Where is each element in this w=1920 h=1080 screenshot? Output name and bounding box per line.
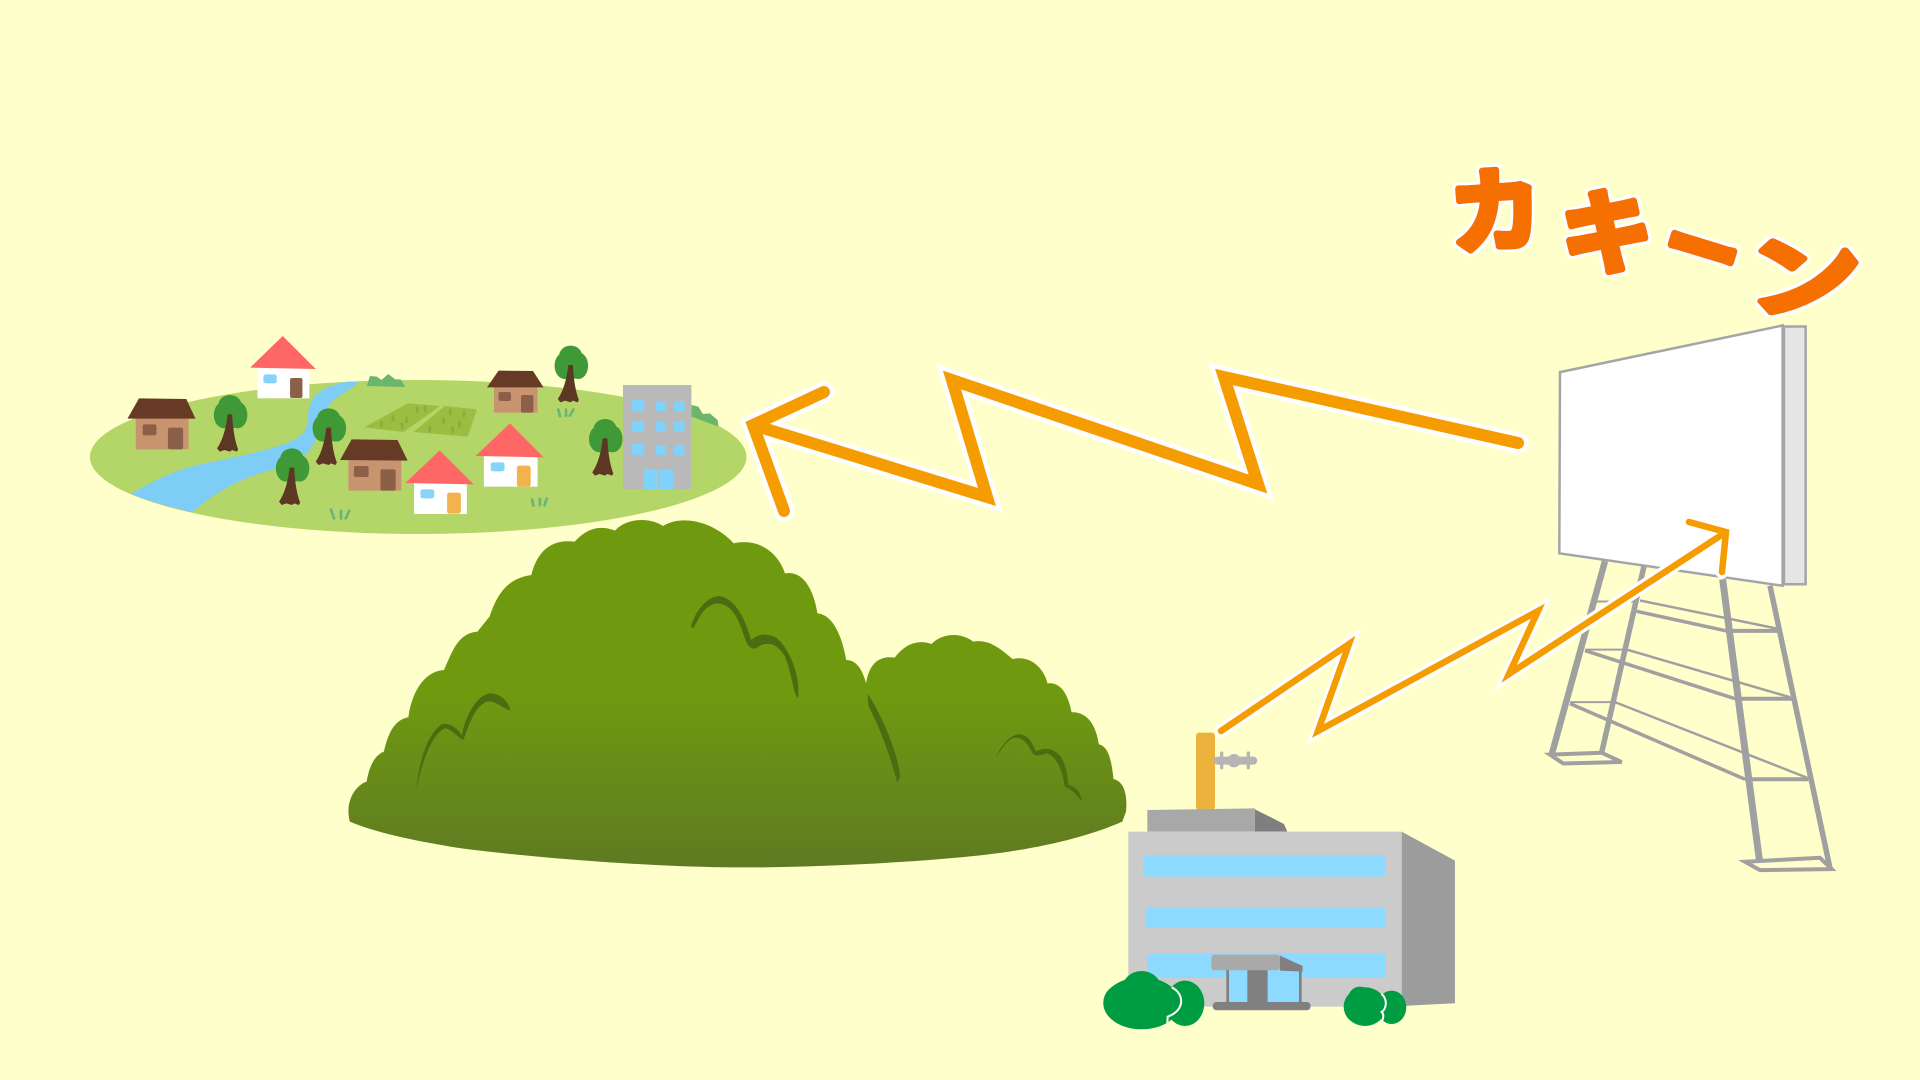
building front bbox=[1128, 832, 1402, 1007]
trees bbox=[214, 346, 623, 505]
brown house 3 bbox=[487, 371, 544, 413]
river bbox=[131, 382, 358, 512]
small zigzag arrow bbox=[1221, 522, 1726, 731]
back bushes bbox=[367, 374, 718, 427]
brown house 1 bbox=[128, 398, 195, 449]
billboard legs bbox=[1550, 561, 1832, 870]
billboard side bbox=[1784, 326, 1806, 584]
mountain body bbox=[348, 520, 1126, 867]
apartment building bbox=[623, 385, 691, 489]
sound effect text: キ bbox=[1559, 182, 1655, 288]
village island bbox=[90, 336, 747, 534]
mountain ridge marks bbox=[416, 596, 1082, 802]
billboard bbox=[1550, 325, 1832, 870]
billboard face bbox=[1559, 325, 1783, 586]
factory bbox=[1103, 733, 1455, 1029]
red roof house 2 bbox=[476, 423, 544, 487]
antenna bbox=[1213, 751, 1257, 769]
grass tufts bbox=[331, 409, 573, 519]
shrub left bbox=[1103, 971, 1204, 1029]
large zigzag arrow bbox=[753, 377, 1518, 511]
red roof house 1 bbox=[250, 336, 316, 398]
sound effect text: ー bbox=[1653, 200, 1750, 303]
chimney bbox=[1196, 733, 1215, 810]
sound effect text: カ bbox=[1446, 159, 1545, 267]
ground bbox=[90, 380, 747, 534]
red roof house 3 bbox=[405, 450, 474, 514]
sound effect text bbox=[1446, 159, 1865, 329]
sound effect text: ン bbox=[1744, 224, 1865, 329]
mountain bbox=[348, 520, 1126, 867]
entrance bbox=[1211, 955, 1311, 1010]
window bands bbox=[1143, 855, 1386, 978]
rice fields bbox=[364, 403, 477, 437]
building side bbox=[1402, 832, 1455, 1006]
brown house 2 bbox=[340, 439, 408, 491]
shrub right bbox=[1344, 987, 1406, 1026]
roof unit bbox=[1147, 808, 1287, 832]
